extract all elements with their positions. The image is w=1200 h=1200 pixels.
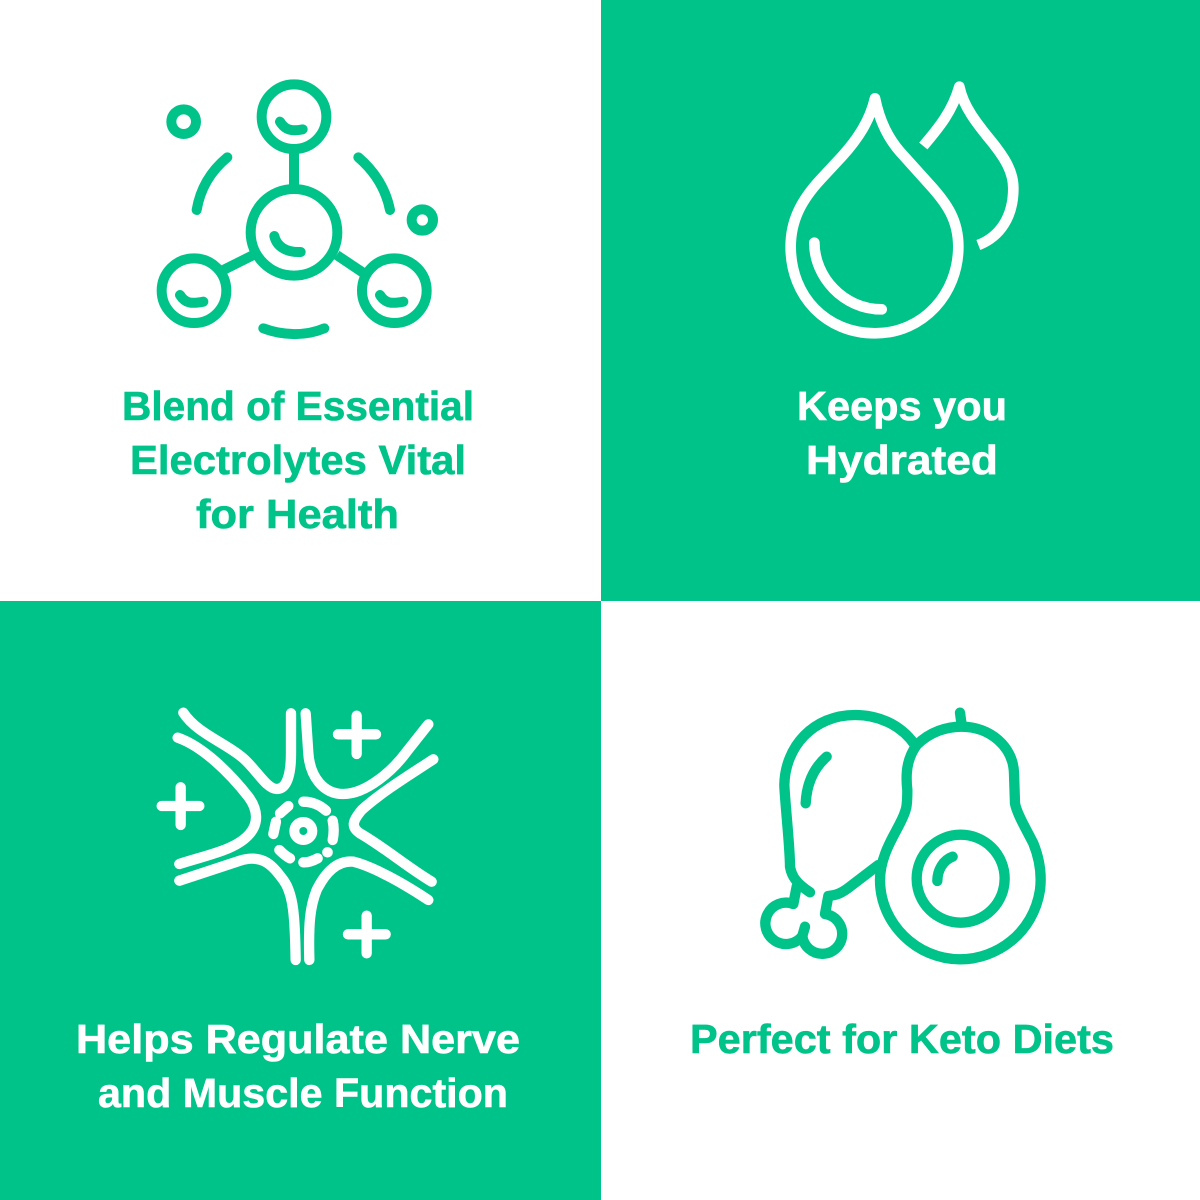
heading: electrolytes: Blend of Essential — [122, 383, 474, 429]
heading: nerve and muscle: Helps Regulate Nerve — [76, 1016, 520, 1062]
heading: hydration — [797, 383, 1007, 483]
heading: electrolytes: Electrolytes Vital — [130, 437, 466, 483]
heading: hydration: Hydrated — [806, 437, 998, 483]
icon: water drops — [791, 87, 1013, 333]
heading: electrolytes: for Health — [196, 491, 399, 537]
panel: electrolytes — [0, 0, 601, 601]
heading: nerve and muscle — [76, 1016, 520, 1116]
panel: hydration — [601, 0, 1200, 601]
panel: nerve and muscle — [0, 601, 601, 1200]
heading: hydration: Keeps you — [797, 383, 1007, 429]
panel: keto — [601, 601, 1200, 1200]
heading: nerve and muscle: and Muscle Function — [98, 1070, 508, 1116]
heading: keto: Perfect for Keto Diets — [690, 1016, 1114, 1062]
icon: molecule — [162, 84, 433, 334]
icon: chicken leg and avocado — [765, 713, 1041, 959]
heading: electrolytes — [122, 383, 474, 537]
icon: neuron — [162, 713, 433, 960]
